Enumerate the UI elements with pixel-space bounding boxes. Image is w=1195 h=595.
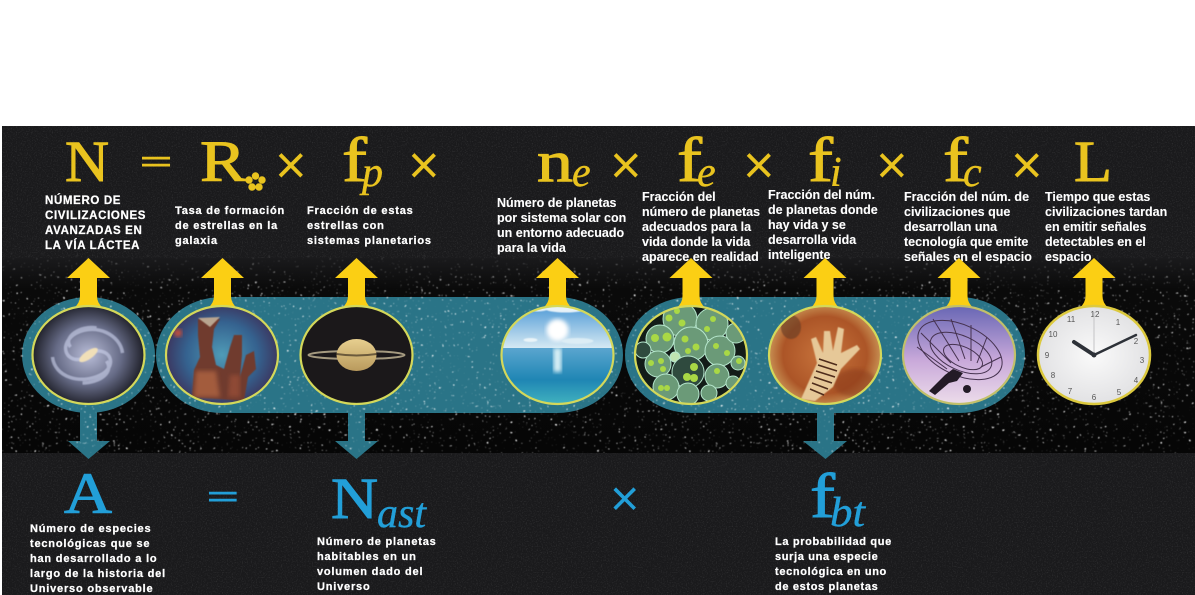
text: Nast description: Universo xyxy=(317,581,370,593)
icon: ocean under the sun xyxy=(500,304,615,406)
top equation: Drake formula: × xyxy=(275,135,307,197)
top equation: Drake formula: N xyxy=(65,129,109,194)
icon: clock face: 6 xyxy=(1092,393,1097,402)
icon: Pillars of Creation nebula xyxy=(164,304,280,406)
text: fbt description: surja una especie xyxy=(775,551,878,563)
text: Nast description: volumen dado del xyxy=(317,566,423,578)
teal capsules joining the grouped terms xyxy=(22,297,1025,459)
yellow arrows pointing up to each term xyxy=(67,258,1116,308)
icon: clock face: 5 xyxy=(1117,388,1122,397)
text: Nast description: habitables en un xyxy=(317,551,417,563)
text: L description: Tiempo que estas xyxy=(1045,190,1150,204)
text: fi description: desarrolla vida xyxy=(768,233,857,247)
text: ne description: por sistema solar con xyxy=(497,211,626,225)
top equation: Drake formula: f xyxy=(342,124,368,195)
top equation: Drake formula: × xyxy=(743,135,775,197)
star field over the band xyxy=(2,250,1195,453)
text: L description: en emitir señales xyxy=(1045,220,1146,234)
top equation: Drake formula: n xyxy=(537,129,573,194)
top equation: Drake formula: e xyxy=(572,150,591,196)
text: Nast description: Número de planetas xyxy=(317,536,437,548)
text: fc description: Fracción del núm. de xyxy=(904,190,1029,204)
top equation: Drake formula: f xyxy=(677,124,703,195)
text: fe description: Fracción del xyxy=(642,190,716,204)
icon: clock face xyxy=(1038,306,1150,404)
icon: clock face: 2 xyxy=(1134,337,1139,346)
text: N description: CIVILIZACIONES xyxy=(45,210,146,222)
text: fe description: adecuados para la xyxy=(642,220,752,234)
top equation: Drake formula: × xyxy=(408,135,440,197)
text: N description: NÚMERO DE xyxy=(45,194,121,207)
text: A description: han desarrollado a lo xyxy=(30,553,157,565)
text: R description: galaxia xyxy=(175,235,218,247)
text: fbt description: tecnológica en uno xyxy=(775,566,887,578)
icon: clock face: 12 xyxy=(1091,310,1100,319)
text: fbt description: La probabilidad que xyxy=(775,536,892,548)
top equation: Drake formula: c xyxy=(963,150,982,196)
bottom equation: A = Nast × fbt: f xyxy=(810,460,836,531)
top equation: Drake formula: p xyxy=(359,150,383,196)
icon: cave painting of a hand xyxy=(768,304,882,406)
text: fi description: Fracción del núm. xyxy=(768,188,875,202)
top equation: Drake formula: i xyxy=(830,150,842,196)
text: fc description: tecnología que emite xyxy=(904,235,1028,249)
text: fp description: sistemas planetarios xyxy=(307,235,432,247)
text: fi description: hay vida y se xyxy=(768,218,846,232)
icon: Milky Way galaxy xyxy=(31,304,146,406)
text: R description: de estrellas en la xyxy=(175,220,278,232)
text: fi description: inteligente xyxy=(768,248,831,262)
text: fc description: desarrollan una xyxy=(904,220,998,234)
bottom equation: A = Nast × fbt: A xyxy=(64,461,112,526)
bottom equation: A = Nast × fbt: = xyxy=(207,478,239,517)
bottom equation: A = Nast × fbt: bt xyxy=(830,490,866,536)
top equation: Drake formula: × xyxy=(1011,135,1043,197)
top equation: Drake formula xyxy=(65,124,1112,197)
background: starry space panel xyxy=(2,126,1195,595)
icon: clock face: 1 xyxy=(1116,318,1121,327)
icon: clock face: 7 xyxy=(1068,387,1073,396)
icon: radio telescope dish xyxy=(902,304,1016,406)
top equation: Drake formula: R xyxy=(200,129,246,194)
text: A description: tecnológicas que se xyxy=(30,538,150,550)
text: fbt description: de estos planetas xyxy=(775,581,878,593)
icon: clock face: 8 xyxy=(1051,371,1056,380)
text: fp description: Fracción de estas xyxy=(307,205,414,217)
icon: clock face: 10 xyxy=(1049,330,1058,339)
text: L description: civilizaciones tardan xyxy=(1045,205,1167,219)
text: fp description: estrellas con xyxy=(307,220,385,232)
text: fi description: de planetas donde xyxy=(768,203,878,217)
top equation: Drake formula: f xyxy=(943,124,969,195)
text: A description: Universo observable xyxy=(30,583,153,595)
top equation: Drake formula: × xyxy=(610,135,642,197)
text: N description: AVANZADAS EN xyxy=(45,225,142,237)
icon: clock face: 9 xyxy=(1045,351,1050,360)
icon: Saturn planet xyxy=(299,304,414,406)
text: fe description: número de planetas xyxy=(642,205,760,219)
top equation: Drake formula: × xyxy=(876,135,908,197)
text: fe description: aparece en realidad xyxy=(642,250,759,264)
text: L description: detectables en el xyxy=(1045,235,1146,249)
icon: green microscopic cells xyxy=(634,304,748,406)
text: N description: LA VÍA LÁCTEA xyxy=(45,239,140,252)
bottom equation: A = Nast × fbt: ast xyxy=(377,491,427,537)
top equation: Drake formula: f xyxy=(808,124,834,195)
icon: clock face: 11 xyxy=(1067,315,1076,324)
top equation: Drake formula: L xyxy=(1074,129,1112,194)
text: ne description: Número de planetas xyxy=(497,196,617,210)
icon: clock face: 3 xyxy=(1140,356,1145,365)
bottom equation: A = Nast × fbt xyxy=(64,460,866,537)
text: fc description: señales en el espacio xyxy=(904,250,1032,264)
top equation: Drake formula: e xyxy=(697,150,716,196)
text: A description: Número de especies xyxy=(30,523,151,535)
text: fe description: vida donde la vida xyxy=(642,235,751,249)
text: ne description: un entorno adecuado xyxy=(497,226,624,240)
bottom equation: A = Nast × fbt: N xyxy=(331,466,378,531)
icon: clock face: 4 xyxy=(1134,376,1139,385)
bottom equation: A = Nast × fbt: × xyxy=(610,471,639,528)
top equation: Drake formula: = xyxy=(140,143,172,182)
text: A description: largo de la historia del xyxy=(30,568,166,580)
text: L description: espacio xyxy=(1045,250,1092,264)
text: ne description: para la vida xyxy=(497,241,567,255)
text: fc description: civilizaciones que xyxy=(904,205,1010,219)
text: R description: Tasa de formación xyxy=(175,205,285,217)
